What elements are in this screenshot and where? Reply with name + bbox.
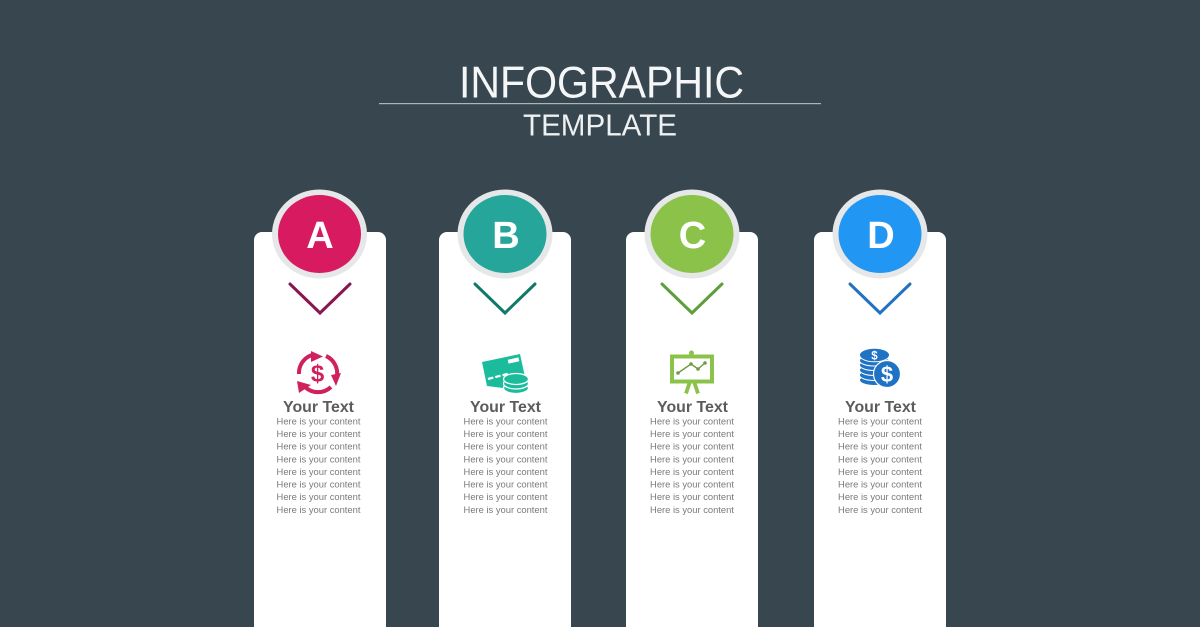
text block C: Here is your content [650, 441, 734, 452]
text block C: Here is your content [650, 453, 734, 464]
text block D: Your Text [845, 399, 917, 416]
icon: card and coins [482, 354, 528, 394]
text block B [464, 399, 548, 515]
text block C: Here is your content [650, 428, 734, 439]
text block D: Here is your content [838, 491, 922, 502]
text block A: Here is your content [277, 416, 361, 426]
text block C: Here is your content [650, 504, 734, 515]
text block B: Here is your content [464, 441, 548, 452]
text block B: Your Text [470, 399, 542, 416]
text block A: Here is your content [277, 441, 361, 452]
text block A: Here is your content [277, 479, 361, 490]
text block C: Here is your content [650, 491, 734, 502]
panel: C [626, 190, 758, 627]
icon: coin stack: $ [871, 350, 878, 362]
panel: B [439, 190, 571, 627]
icon: presentation board [672, 350, 712, 394]
card C background [626, 232, 758, 627]
text block A: Here is your content [277, 466, 361, 477]
text block D: Here is your content [838, 479, 922, 490]
icon: dollar with circular arrows [297, 351, 341, 393]
chevron A [290, 284, 350, 313]
icon: dollar with circular arrows: $ [311, 360, 325, 388]
text block C [650, 399, 734, 515]
panel: A [254, 190, 386, 627]
text block B: Here is your content [464, 504, 548, 515]
badge C [644, 190, 740, 278]
text block B: Here is your content [464, 491, 548, 502]
text block D: Here is your content [838, 428, 922, 439]
badge B [458, 190, 552, 278]
panel: D [814, 190, 946, 627]
text block A: Here is your content [277, 491, 361, 502]
text block D: Here is your content [838, 504, 922, 515]
text block C: Here is your content [650, 416, 734, 426]
text block D: Here is your content [838, 453, 922, 464]
text block B: Here is your content [464, 428, 548, 439]
text block B: Here is your content [464, 416, 548, 426]
text block D: Here is your content [838, 466, 922, 477]
icon: coin stack: $ [881, 362, 893, 387]
chevron C [662, 284, 722, 313]
text block A [277, 399, 361, 515]
text block D: Here is your content [838, 441, 922, 452]
card D background [814, 232, 946, 627]
text block C: Here is your content [650, 466, 734, 477]
text block D [838, 399, 922, 515]
text block C: Here is your content [650, 479, 734, 490]
badge A: A [306, 215, 334, 257]
text block C: Your Text [657, 399, 729, 416]
title [379, 58, 821, 142]
badge A [272, 190, 367, 278]
badge D: D [867, 215, 895, 257]
title: INFOGRAPHIC [459, 58, 744, 108]
badge C: C [679, 215, 706, 257]
text block B: Here is your content [464, 453, 548, 464]
card A background [254, 232, 386, 627]
chevron D [850, 284, 910, 313]
badge D [832, 190, 928, 278]
text block B: Here is your content [464, 479, 548, 490]
icon: coin stack [860, 348, 900, 388]
text block A: Your Text [283, 399, 355, 416]
text block D: Here is your content [838, 416, 922, 426]
card B background [439, 232, 571, 627]
text block A: Here is your content [277, 428, 361, 439]
text block A: Here is your content [277, 504, 361, 515]
chevron B [475, 284, 535, 313]
title: TEMPLATE [523, 108, 677, 142]
text block A: Here is your content [277, 453, 361, 464]
text block B: Here is your content [464, 466, 548, 477]
badge B: B [492, 215, 520, 257]
